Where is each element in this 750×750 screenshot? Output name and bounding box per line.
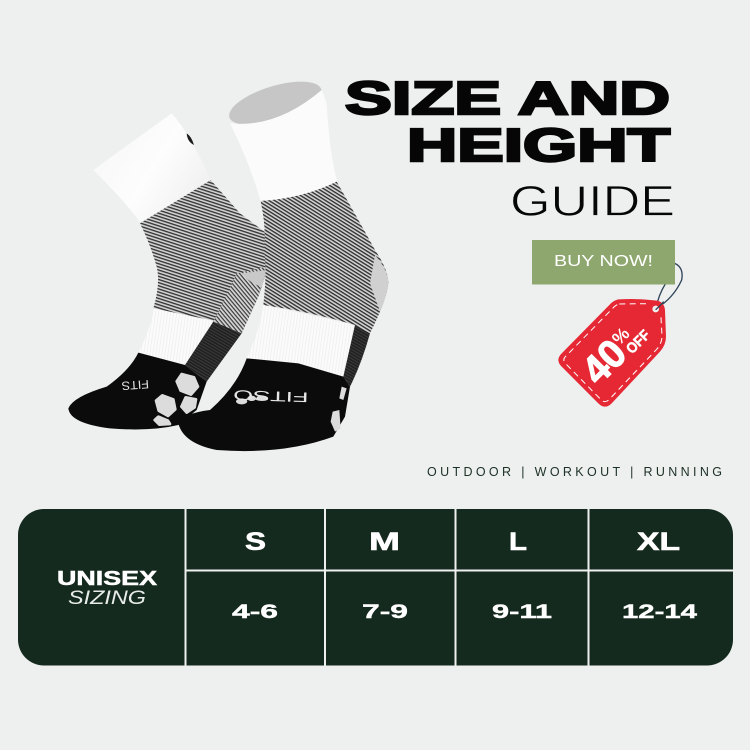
- title: [345, 72, 675, 226]
- size ranges: 9-11: [492, 602, 553, 623]
- size headers: L: [509, 528, 527, 556]
- size headers: XL: [637, 528, 680, 556]
- size headers: M: [369, 528, 400, 556]
- discount price tag: [558, 263, 682, 407]
- right sock: [178, 73, 388, 451]
- title line: SIZE AND: SIZE AND: [345, 72, 670, 124]
- tagline: OUTDOOR | WORKOUT | RUNNING: [427, 465, 722, 479]
- left sock logo text: FITS: [121, 377, 149, 393]
- table background: [18, 509, 733, 666]
- row label: unisex sizing: SIZING: [68, 588, 146, 609]
- tag text: percent: %: [608, 323, 633, 349]
- tag text: OFF: OFF: [624, 327, 654, 357]
- tag cord: [656, 263, 682, 309]
- right sock logo text: FITSO: [233, 387, 309, 406]
- sizing table: [18, 509, 733, 666]
- tag eyelet: [652, 306, 659, 312]
- table grid lines: [186, 509, 733, 666]
- size headers: [245, 528, 680, 556]
- tag stitching: [564, 304, 662, 402]
- size ranges: 12-14: [622, 602, 698, 623]
- tag text: 40: 40: [574, 331, 635, 393]
- size ranges: [232, 602, 698, 623]
- left sock hexagon grip: [155, 374, 198, 425]
- row label: unisex sizing: UNISEX: [57, 568, 158, 590]
- size ranges: 7-9: [362, 602, 408, 623]
- size ranges: 4-6: [232, 602, 278, 623]
- right sock hexagon grip: [236, 387, 347, 432]
- row label: unisex sizing: [57, 568, 158, 609]
- tag body: [558, 299, 666, 407]
- size headers: S: [245, 528, 266, 556]
- left sock: [68, 113, 268, 429]
- title line: HEIGHT: HEIGHT: [407, 119, 670, 171]
- title line: GUIDE: GUIDE: [510, 178, 675, 226]
- product photo: pair of socks: [68, 73, 388, 451]
- buy now button: [532, 240, 675, 284]
- buy now button: BUY NOW!: [554, 253, 653, 270]
